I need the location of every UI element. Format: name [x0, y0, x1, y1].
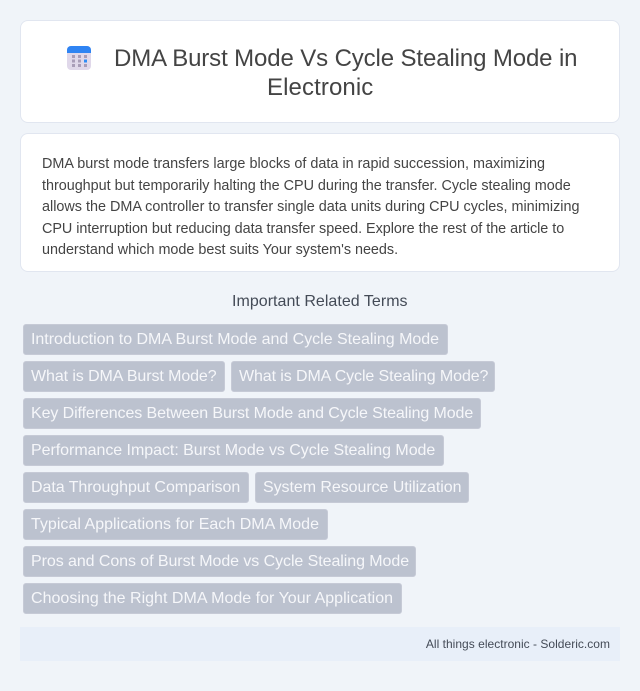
chip 6 [23, 472, 249, 503]
chip 4: Key Differences Between Burst Mode and Cycle Stealing Mode [31, 405, 473, 422]
chip 1: Introduction to DMA Burst Mode and Cycle Stealing Mode [31, 331, 439, 348]
chip 9: Pros and Cons of Burst Mode vs Cycle Stealing Mode [31, 553, 409, 570]
chip 7 [255, 472, 469, 503]
chip 8: Typical Applications for Each DMA Mode [31, 516, 319, 533]
chip 3 [231, 361, 495, 392]
panel: title card [20, 20, 620, 123]
chip 7: System Resource Utilization [263, 479, 461, 496]
chip 3: What is DMA Cycle Stealing Mode? [239, 368, 488, 385]
chip 2: What is DMA Burst Mode? [31, 368, 217, 385]
chip 5: Performance Impact: Burst Mode vs Cycle Stealing Mode [31, 442, 435, 459]
panel: description [20, 133, 620, 272]
chip 10: Choosing the Right DMA Mode for Your Application [31, 590, 393, 607]
description text: throughput but temporarily halting the CPU during the transfer. Cycle stealing mode [42, 178, 571, 194]
title line 2: Electronic [267, 74, 373, 101]
description text: CPU interruption but reducing data transfer speed. Explore the rest of the article to [42, 221, 564, 237]
footer credit: All things electronic - Solderic.com [426, 637, 610, 651]
chip 9 [23, 546, 416, 577]
chip 8 [23, 509, 328, 540]
description text: DMA burst mode transfers large blocks of data in rapid succession, maximizing [42, 156, 545, 172]
chips: related terms [23, 324, 495, 614]
chip 1 [23, 324, 448, 355]
description text: allows the DMA controller to transfer single data units during CPU cycles, minimizing [42, 199, 579, 215]
footer bar [20, 627, 620, 661]
chip 5 [23, 435, 444, 466]
chip 10 [23, 583, 402, 614]
chip 6: Data Throughput Comparison [31, 479, 240, 496]
icon: calendar [67, 46, 91, 70]
description text [42, 156, 579, 258]
chip 4 [23, 398, 481, 429]
description text: understand which mode best suits Your system's needs. [42, 242, 398, 258]
heading: important related terms: Important Related Terms [232, 293, 408, 310]
chip 2 [23, 361, 225, 392]
title line 1: DMA Burst Mode Vs Cycle Stealing Mode in [114, 45, 577, 72]
